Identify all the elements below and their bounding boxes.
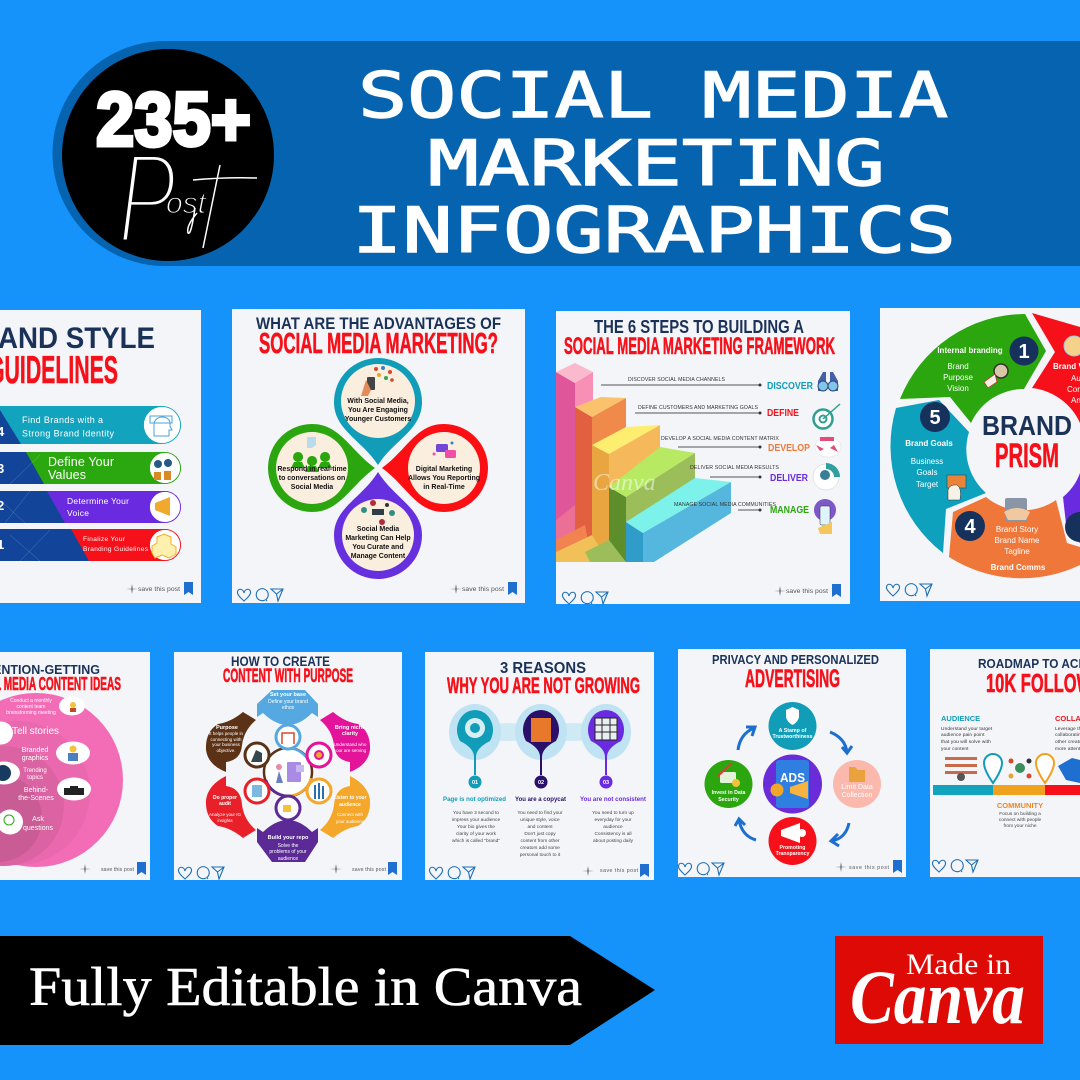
- column: you are a copycat: You need to find your: [517, 810, 563, 816]
- segment 5: brand goals: Goals: [917, 468, 937, 477]
- petal: bring niche clarity: your are serving: [334, 748, 367, 753]
- segment 1: internal branding: Vision: [947, 384, 969, 393]
- social icons: [562, 592, 608, 604]
- step: deliver: DELIVER: [770, 473, 809, 484]
- circle: invest in data security: [704, 760, 752, 808]
- teardrop: digital marketing reporting: Digital Marketing: [416, 466, 472, 473]
- guideline rows: Voice: [67, 508, 89, 518]
- column: you are a copycat: creators add some: [520, 845, 560, 851]
- heading: privacy: PRIVACY AND PERSONALIZED: [712, 653, 879, 667]
- heading: content with purpose: HOW TO CREATE: [231, 654, 330, 669]
- segment 4: brand comms: 4: [964, 516, 976, 538]
- banner: fully editable in canva: [0, 936, 655, 1045]
- guideline rows: Finalize Your: [83, 536, 126, 543]
- petal: set your base: Define your brand: [268, 699, 308, 705]
- petal: set your base: Set your base: [270, 692, 306, 698]
- save this post: [774, 584, 841, 597]
- step: deliver: DELIVER SOCIAL MEDIA RESULTS: [690, 465, 779, 471]
- ideas text: graphics: [22, 755, 49, 762]
- step: define: [635, 404, 840, 428]
- flow graphic: 01: [472, 780, 478, 786]
- column: you are a copycat: Don't just copy: [524, 831, 556, 837]
- roadmap icons: [945, 754, 1080, 783]
- save this post: save this post: [352, 867, 387, 873]
- step: manage: MANAGE SOCIAL MEDIA COMMUNITIES: [674, 502, 776, 508]
- column: page is not optimized: You have 3 second to: [453, 810, 499, 816]
- badge: 235+ Post: P: [118, 125, 176, 271]
- circle: promoting transparency: Promoting: [780, 845, 805, 851]
- segment 5: brand goals: Target: [916, 480, 939, 489]
- teardrop: engaging younger customers: Younger Customers: [345, 416, 411, 423]
- step: define: DEFINE: [767, 408, 799, 419]
- guideline rows: [0, 406, 181, 561]
- teardrop: curate and manage content: Marketing Can Help: [345, 535, 411, 542]
- petal: purpose: objective.: [216, 748, 236, 753]
- heading: brand style guidelines: [0, 322, 155, 392]
- title: [352, 59, 956, 267]
- save this post: [126, 582, 193, 595]
- step: manage: [674, 499, 836, 534]
- teardrop: respond in real-time: to conversations on: [279, 475, 345, 482]
- guideline rows: Strong Brand Identity: [22, 428, 114, 438]
- header banner: [53, 41, 1080, 266]
- step: discover: [601, 372, 838, 392]
- petal: set your base: [257, 690, 318, 725]
- segment 1: internal branding: Internal branding: [937, 346, 1003, 355]
- teardrop: digital marketing reporting: Allows You Reporting: [408, 475, 480, 482]
- save this post: [330, 862, 397, 875]
- column: page is not optimized: Page is not optimized: [443, 796, 506, 803]
- column: you are not consistent: You need to turn up: [592, 810, 634, 816]
- heading: advantages: [256, 315, 501, 360]
- column: you are a copycat: You are a copycat: [515, 796, 567, 803]
- column: page is not optimized: which is called "brand": [452, 838, 500, 844]
- segment 2: brand voice: [1032, 313, 1080, 423]
- petal: listen to your audience: Listen to your: [333, 795, 367, 801]
- save this post: save this post: [600, 868, 639, 874]
- teardrop: engaging younger customers: [334, 358, 422, 465]
- petal: do proper audit: audit: [219, 801, 231, 807]
- step: discover: DISCOVER SOCIAL MEDIA CHANNELS: [628, 377, 725, 383]
- circle: trustworthiness: [768, 702, 816, 750]
- block: community: connect with people: [999, 817, 1042, 823]
- teardrop: respond in real-time: Respond in real-time: [277, 466, 347, 473]
- guideline rows: Values: [48, 468, 86, 482]
- ideas text: the-Scenes: [18, 795, 54, 802]
- panel: 6 steps framework: [556, 311, 850, 604]
- block: collaboration: [1055, 714, 1080, 752]
- ideas text: brainstorming meeting: [6, 710, 56, 716]
- teardrop: engaging younger customers: With Social Media,: [347, 398, 409, 405]
- title: MARKETING: [428, 127, 885, 200]
- guideline rows: Determine Your: [67, 496, 129, 506]
- heading: 6 steps: [564, 317, 835, 360]
- panel: brand prism: [880, 308, 1080, 601]
- segment 4: brand comms: Tagline: [1004, 547, 1030, 556]
- circle: limit data: Collection: [842, 792, 872, 799]
- column: you are a copycat: personal touch to it: [520, 852, 561, 858]
- petal: do proper audit: Analyze your IG: [209, 812, 242, 817]
- step: manage: MANAGE: [770, 505, 809, 516]
- save this post: [835, 860, 902, 873]
- segment 4: brand comms: Brand Story: [996, 525, 1038, 534]
- guideline rows: Define Your: [48, 455, 114, 469]
- social icons: [237, 589, 283, 601]
- block: audience: Understand your target: [941, 726, 993, 732]
- petal: bring niche clarity: clarity: [342, 731, 359, 737]
- teardrop: curate and manage content: You Curate and: [352, 544, 404, 551]
- column: you are not consistent: audience: [603, 824, 623, 830]
- teardrop: digital marketing reporting: [382, 424, 488, 512]
- heading: content with purpose: [223, 654, 353, 687]
- teardrop: respond in real-time: Social Media: [291, 484, 333, 491]
- column: you are not consistent: Consistency is all: [594, 831, 632, 837]
- segment 3: [1063, 473, 1080, 543]
- panel: brand style guidelines: [0, 310, 201, 603]
- teardrop: curate and manage content: [334, 472, 422, 579]
- petal: purpose: connecting with: [210, 737, 242, 742]
- block: audience: AUDIENCE: [941, 714, 980, 723]
- column: you are a copycat: and content: [527, 824, 553, 830]
- heading: 6 steps: THE 6 STEPS TO BUILDING A: [594, 317, 804, 337]
- save this post: save this post: [101, 867, 135, 873]
- segment 1: internal branding: 1: [1018, 341, 1030, 363]
- circle: limit data: [833, 760, 881, 808]
- title: INFOGRAPHICS: [352, 194, 956, 267]
- step: develop: DEVELOP: [768, 443, 810, 454]
- save this post: save this post: [138, 586, 180, 593]
- guideline rows: Find Brands with a: [22, 415, 103, 425]
- petal: build your repo: [257, 820, 318, 862]
- center: brand prism: [982, 410, 1072, 475]
- panel: attention-getting content ideas: [0, 652, 150, 880]
- heading: roadmap: [978, 657, 1080, 698]
- central hub illustration: [264, 748, 312, 796]
- circle: invest in data security: Security: [718, 797, 739, 803]
- petal: set your base: ethos: [282, 705, 295, 711]
- segment 1: internal branding: [900, 314, 1046, 423]
- block: audience: [941, 714, 993, 752]
- title: SOCIAL MEDIA: [358, 59, 948, 132]
- cycle arrows: [735, 727, 852, 846]
- block: audience: audience pain point: [941, 732, 985, 738]
- heading: 6 steps: SOCIAL MEDIA MARKETING FRAMEWORK: [564, 333, 835, 360]
- petal: purpose: It helps people in: [209, 731, 244, 736]
- circle: promoting transparency: [768, 817, 816, 865]
- circle: trustworthiness: Trustworthiness: [772, 734, 813, 740]
- small icon circles: [245, 725, 331, 820]
- column: page is not optimized: [443, 796, 506, 844]
- heading: advantages: SOCIAL MEDIA MARKETING?: [259, 328, 498, 360]
- ideas text: Branded: [22, 747, 48, 754]
- flow graphic: 02: [538, 780, 544, 786]
- circle: promoting transparency: Transparency: [776, 851, 809, 857]
- center circle: ads: [763, 754, 822, 814]
- petal: build your repo: Solve the: [278, 843, 299, 849]
- column: you are a copycat: content from other: [521, 838, 560, 844]
- ideas text: [6, 698, 59, 832]
- save this post: save this post: [849, 865, 890, 871]
- heading: privacy: [712, 653, 879, 693]
- panel: privacy and personalized advertising: [678, 649, 906, 877]
- save this post: [79, 862, 146, 875]
- social icons: [886, 584, 932, 596]
- center circle: ads: ADS: [780, 770, 805, 785]
- ideas text: Trending: [23, 768, 47, 774]
- block: audience: that you will solve with: [941, 739, 991, 745]
- block: community: COMMUNITY: [997, 801, 1043, 810]
- badge: made in canva: Made in: [906, 948, 1011, 981]
- heading: not growing: WHY YOU ARE NOT GROWING: [447, 673, 640, 698]
- petal: listen to your audience: [320, 776, 370, 838]
- panel: why you are not growing: [425, 652, 654, 880]
- petal: do proper audit: Do proper: [213, 795, 237, 801]
- petal: purpose: your business: [212, 742, 241, 747]
- block: audience: your content: [941, 746, 969, 752]
- ideas text: Ask: [32, 816, 44, 823]
- petal: bring niche clarity: [320, 712, 370, 772]
- banner: fully editable in canva: Fully Editable in Canva: [29, 956, 582, 1017]
- column: page is not optimized: impress your audience: [452, 817, 500, 823]
- teardrop: curate and manage content: Manage Content: [351, 553, 406, 560]
- staircase chart: [556, 363, 731, 562]
- segment 5: brand goals: [890, 400, 986, 553]
- icon bubbles: [0, 696, 91, 834]
- panel: advantages of social media marketing: [232, 309, 525, 603]
- block: community: Focus on building a: [999, 811, 1041, 817]
- panel: roadmap to 10k followers: [930, 649, 1080, 877]
- segment 5: brand goals: 5: [929, 407, 941, 429]
- social icons: [178, 867, 224, 879]
- heading: advantages: WHAT ARE THE ADVANTAGES OF: [256, 315, 501, 333]
- step: deliver: [690, 463, 840, 490]
- circle: limit data: Limit Data: [841, 784, 873, 791]
- social icons: [932, 860, 978, 872]
- save this post: save this post: [462, 586, 504, 593]
- heading: content with purpose: CONTENT WITH PURPOSE: [223, 666, 353, 687]
- petal: listen to your audience: Connect with: [337, 812, 364, 817]
- ideas text: topics: [27, 775, 43, 781]
- block: community: from your niche: [1003, 823, 1037, 829]
- panel: content with purpose: [174, 652, 402, 880]
- petal: bring niche clarity: Bring niche: [335, 725, 365, 731]
- teardrop: digital marketing reporting: in Real-Time: [423, 484, 465, 491]
- ideas text: Behind-: [24, 787, 49, 794]
- staircase chart: Canva: [593, 470, 656, 496]
- nested pink circles: [0, 693, 123, 867]
- petal: do proper audit: [206, 776, 256, 838]
- petal: build your repo: audience: [278, 856, 298, 862]
- badge: 235+ Post: [62, 49, 274, 271]
- badge: 235+ Post: ost: [166, 187, 208, 220]
- column: you are not consistent: You are not consistent: [580, 796, 647, 803]
- segment 1: internal branding: Purpose: [943, 373, 973, 382]
- column: you are not consistent: about posting daily: [593, 838, 634, 844]
- teardrop: engaging younger customers: You Are Engaging: [348, 407, 408, 414]
- teardrop: curate and manage content: Social Media: [357, 526, 399, 533]
- column: you are a copycat: unique style, voice: [520, 817, 560, 823]
- circle: invest in data security: Invest in Data: [712, 790, 745, 796]
- ideas text: Tell stories: [12, 726, 59, 737]
- segment 4: brand comms: Brand Name: [995, 536, 1040, 545]
- badge: made in canva: Canva: [850, 956, 1025, 1040]
- heading: not growing: [447, 660, 640, 698]
- column: page is not optimized: Your bio gives the: [457, 824, 495, 830]
- petal: purpose: [206, 712, 256, 772]
- social icons: [678, 863, 724, 875]
- column: you are not consistent: everyday for your: [594, 817, 632, 823]
- column: page is not optimized: clarity of your work: [456, 831, 497, 837]
- block: community: [997, 801, 1043, 829]
- heading: attention-getting: [0, 663, 121, 694]
- segment 5: brand goals: Business: [911, 457, 943, 466]
- ideas text: questions: [23, 825, 53, 832]
- segment 4: brand comms: [949, 497, 1080, 578]
- heading: privacy: ADVERTISING: [745, 665, 840, 693]
- segment 1: internal branding: Brand: [947, 362, 969, 371]
- flow graphic: 03: [603, 780, 609, 786]
- ideas text: content team: [17, 704, 45, 710]
- petal: listen to your audience: your audience: [336, 819, 365, 824]
- petal: build your repo: Build your repo: [268, 835, 309, 841]
- badge: 235+ Post: 235+: [96, 78, 251, 162]
- step: develop: DEVELOP A SOCIAL MEDIA CONTENT MATRIX: [661, 436, 779, 442]
- column: you are a copycat: [515, 796, 567, 858]
- segment 5: brand goals: Brand Goals: [905, 439, 953, 448]
- badge: made in canva: [835, 936, 1043, 1044]
- segment 4: brand comms: Brand Comms: [991, 563, 1046, 572]
- save this post: [450, 582, 517, 595]
- circle: trustworthiness: A Stamp of: [779, 728, 807, 734]
- teardrop: respond in real-time: [268, 424, 375, 512]
- guideline rows: Branding Guidelines: [83, 546, 149, 553]
- heading: not growing: 3 REASONS: [500, 660, 586, 677]
- petal: build your repo: problems of your: [269, 849, 307, 855]
- flow graphic: [449, 704, 631, 788]
- step: define: DEFINE CUSTOMERS AND MARKETING GOALS: [638, 405, 758, 411]
- petal: purpose: Purpose: [216, 725, 238, 731]
- petal: do proper audit: insights: [217, 818, 233, 823]
- save this post: save this post: [786, 588, 828, 595]
- ideas text: Conduct a monthly: [10, 698, 52, 704]
- step: develop: [661, 436, 841, 457]
- petal: listen to your audience: audience: [339, 802, 361, 808]
- step: discover: DISCOVER: [767, 381, 814, 392]
- column: you are not consistent: [580, 796, 647, 844]
- petal: bring niche clarity: Understand who: [334, 742, 367, 747]
- save this post: [582, 864, 649, 877]
- social icons: [429, 867, 475, 879]
- roadmap bar: [933, 785, 1080, 795]
